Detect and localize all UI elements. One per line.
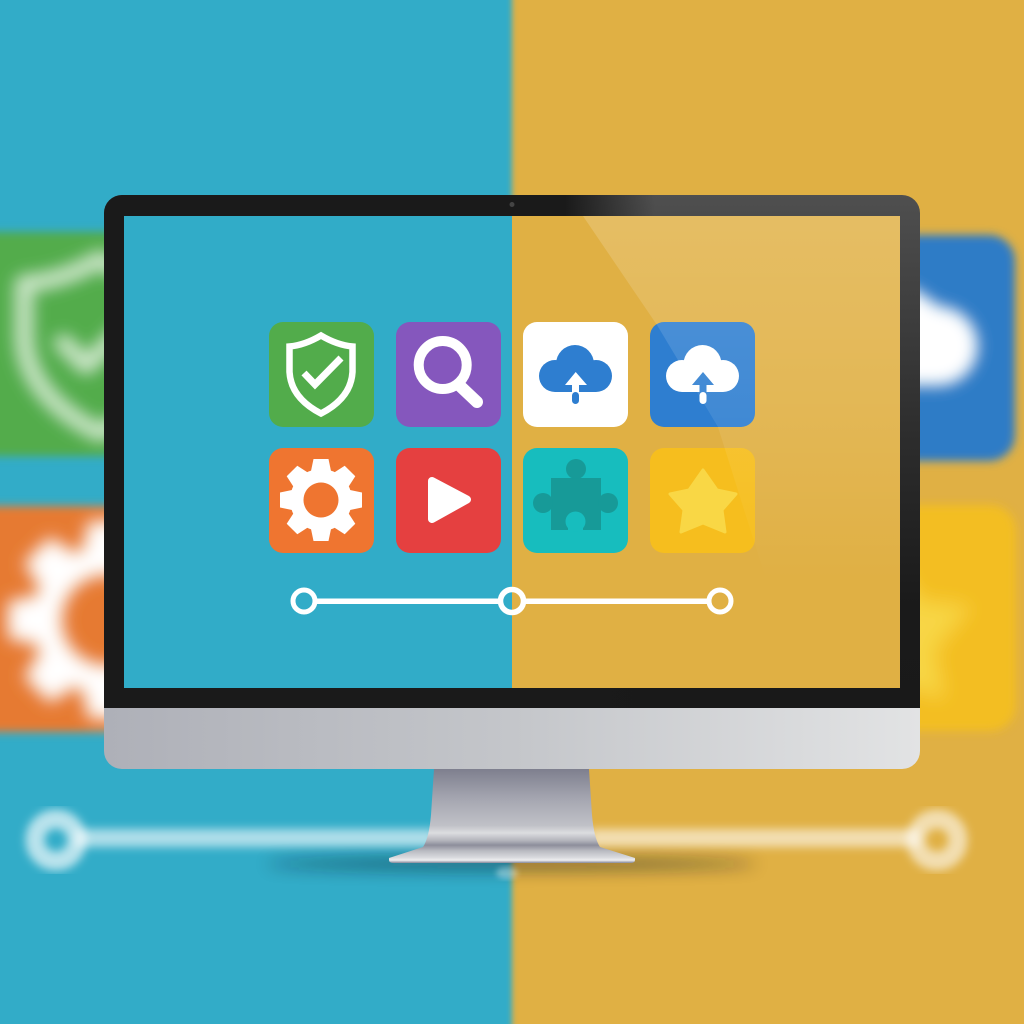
icon: blue tile with white cloud upload <box>650 322 755 427</box>
icon: teal puzzle piece <box>523 448 628 553</box>
blurred background icon: green shield <box>0 232 176 456</box>
icon: red play button <box>396 448 501 553</box>
icon: white tile with blue cloud upload <box>523 322 628 427</box>
icon: green shield <box>269 322 374 427</box>
screen glare <box>583 216 900 511</box>
webcam dot <box>510 202 514 207</box>
stand shadow on background <box>267 858 757 870</box>
blurred background icon: orange gear <box>0 506 205 732</box>
monitor stand <box>389 769 635 863</box>
monitor bezel <box>104 195 920 708</box>
monitor chin <box>104 708 920 769</box>
soft light patch beneath the stand <box>496 867 518 879</box>
monitor screen <box>124 216 900 688</box>
timeline slider <box>293 590 731 612</box>
monitor <box>104 195 920 769</box>
icon: orange gear <box>269 448 374 553</box>
blurred background icon: blue cloud <box>800 235 1015 461</box>
blurred background timeline <box>35 819 958 861</box>
blurred background icon: yellow star <box>800 505 1016 731</box>
icon: yellow star <box>650 448 755 553</box>
icon: purple magnifier <box>396 322 501 427</box>
